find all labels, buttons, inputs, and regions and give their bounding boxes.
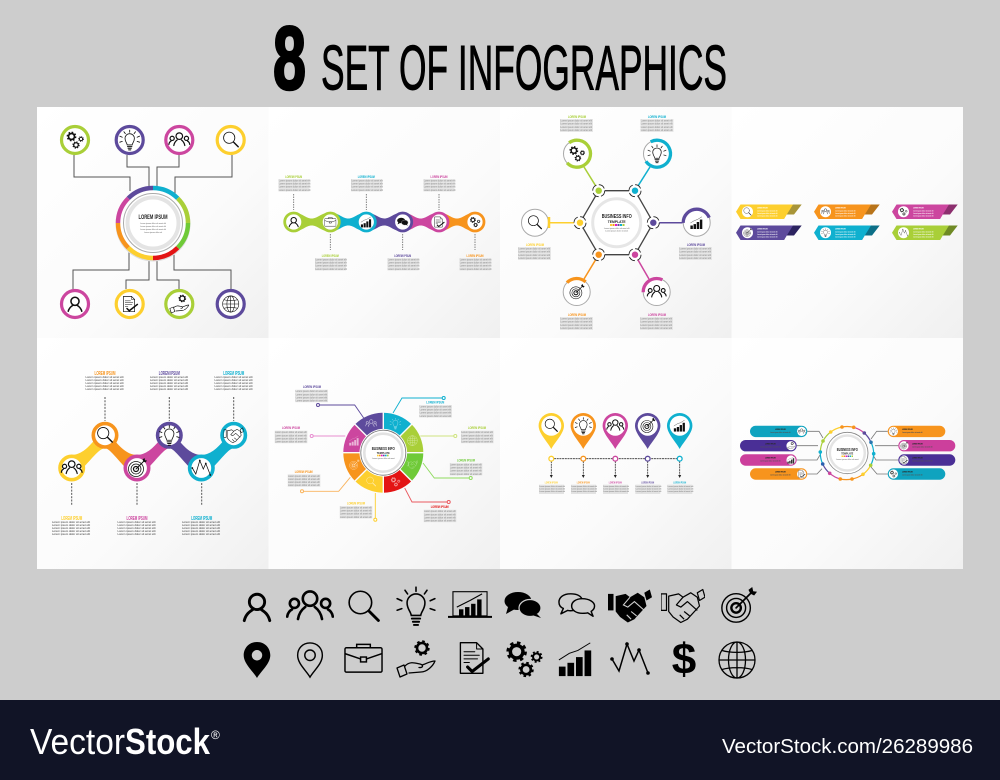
donut text blocks: Lorem ipsum dolor sit amet elit bbox=[275, 437, 307, 440]
banner: yellow: Lorem ipsum dolor sit amet elit bbox=[757, 214, 778, 218]
banner: cyan: LOREM IPSUM bbox=[835, 228, 846, 230]
pill: left orange: LOREM IPSUM bbox=[775, 472, 786, 474]
pill: right cyan bbox=[888, 468, 945, 480]
pill: left magenta: Lorem ipsum dolor sit amet elit bbox=[760, 460, 781, 463]
pin text blocks: Lorem ipsum dolor sit amet elit bbox=[668, 490, 694, 493]
donut text blocks: Lorem ipsum dolor sit amet elit bbox=[420, 415, 452, 418]
wave text blocks: Lorem ipsum dolor sit amet elit bbox=[182, 526, 220, 530]
banner: purple bbox=[736, 226, 802, 240]
banner: orange bbox=[814, 204, 880, 219]
wave text blocks: Lorem ipsum dolor sit amet elit bbox=[150, 387, 188, 391]
hexagon text blocks: Lorem ipsum dolor sit amet elit bbox=[560, 120, 592, 122]
donut text blocks: Lorem ipsum dolor sit amet elit bbox=[461, 440, 493, 444]
hexagon labels: LOREM IPSUM bbox=[568, 312, 586, 317]
pill: left purple: LOREM IPSUM bbox=[765, 443, 776, 445]
step text blocks: Lorem ipsum dolor sit amet elit bbox=[424, 186, 456, 189]
panel: segmented donut bbox=[268, 338, 500, 569]
central ring: Lorem ipsum dolor sit amet elit bbox=[140, 225, 166, 228]
timeline bbox=[549, 456, 682, 478]
step labels: LOREM IPSUM bbox=[394, 253, 412, 258]
banner: purple: Lorem ipsum dolor sit amet elit bbox=[757, 233, 778, 236]
donut text blocks: Lorem ipsum dolor sit amet elit bbox=[420, 409, 452, 412]
hexagon bbox=[580, 191, 653, 255]
pill: left orange: Lorem ipsum dolor sit amet elit bbox=[770, 474, 791, 477]
banner: orange: Lorem ipsum dolor sit amet elit bbox=[835, 212, 856, 215]
dashed leader lines bbox=[72, 397, 234, 506]
step text blocks: Lorem ipsum dolor sit amet elit bbox=[279, 180, 311, 182]
hexagon text blocks: Lorem ipsum dolor sit amet elit bbox=[640, 321, 672, 324]
donut text blocks: Lorem ipsum dolor sit amet elit bbox=[450, 470, 482, 473]
watermark bar: ® bbox=[211, 728, 220, 742]
banner: lime: LOREM IPSUM bbox=[913, 228, 924, 230]
hexagon text blocks: Lorem ipsum dolor sit amet elit bbox=[560, 129, 592, 132]
wave text blocks: Lorem ipsum dolor sit amet elit bbox=[214, 387, 253, 391]
step labels: LOREM IPSUM bbox=[285, 174, 303, 179]
step text blocks: Lorem ipsum dolor sit amet elit bbox=[460, 262, 492, 265]
step text blocks: Lorem ipsum dolor sit amet elit bbox=[351, 189, 383, 192]
wave labels bbox=[61, 371, 244, 522]
donut labels: LOREM IPSUM bbox=[282, 425, 300, 430]
donut centre bbox=[360, 429, 407, 477]
donut labels bbox=[282, 384, 486, 509]
chain nodes bbox=[285, 213, 484, 231]
central ring: Lorem ipsum dolor sit amet elit bbox=[140, 222, 166, 225]
step labels bbox=[285, 174, 484, 258]
watermark bar bbox=[0, 700, 1000, 780]
central circle: TEMPLATE bbox=[841, 452, 854, 456]
wave labels: LOREM IPSUM bbox=[126, 516, 148, 522]
pill: right purple: LOREM IPSUM bbox=[912, 458, 923, 460]
donut text blocks bbox=[275, 390, 494, 522]
hexagon text blocks: Lorem ipsum dolor sit amet elit bbox=[641, 123, 673, 126]
donut text blocks: Lorem ipsum dolor sit amet elit bbox=[420, 406, 452, 408]
outer icons bbox=[528, 145, 702, 299]
map pins bbox=[539, 413, 692, 449]
hexagon text blocks: Lorem ipsum dolor sit amet elit bbox=[679, 248, 711, 250]
donut labels: LOREM IPSUM bbox=[431, 504, 449, 509]
hexagon labels: LOREM IPSUM bbox=[648, 114, 666, 119]
wave text blocks: Lorem ipsum dolor sit amet elit bbox=[118, 523, 156, 527]
wave text blocks: Lorem ipsum dolor sit amet elit bbox=[118, 526, 156, 530]
wave text blocks: Lorem ipsum dolor sit amet elit bbox=[214, 375, 253, 379]
vertex dots bbox=[574, 185, 659, 261]
hexagon text blocks: Lorem ipsum dolor sit amet elit bbox=[640, 324, 672, 327]
watermark bar: Stock bbox=[125, 721, 211, 762]
banner: lime: Lorem ipsum dolor sit amet elit bbox=[913, 236, 934, 238]
hexagon text blocks: Lorem ipsum dolor sit amet elit bbox=[560, 327, 592, 330]
pin text blocks: Lorem ipsum dolor sit amet elit bbox=[603, 487, 629, 490]
banner: lime bbox=[892, 226, 958, 240]
title: 8 bbox=[273, 9, 306, 109]
wave labels: LOREM IPSUM bbox=[94, 371, 116, 377]
donut text blocks: Lorem ipsum dolor sit amet elit bbox=[424, 520, 456, 522]
step text blocks: Lorem ipsum dolor sit amet elit bbox=[279, 189, 311, 192]
banner: cyan: Lorem ipsum dolor sit amet elit bbox=[835, 233, 856, 236]
wave text blocks: Lorem ipsum dolor sit amet elit bbox=[52, 532, 90, 536]
central circle bbox=[827, 432, 868, 474]
donut segments bbox=[341, 410, 426, 495]
central ring: Lorem ipsum dolor sit bbox=[144, 231, 163, 234]
donut text blocks: Lorem ipsum dolor sit amet elit bbox=[450, 473, 482, 476]
hexagon text blocks: Lorem ipsum dolor sit amet elit bbox=[641, 126, 673, 129]
pin icons bbox=[545, 418, 685, 434]
pin text blocks: Lorem ipsum dolor sit amet elit bbox=[636, 487, 662, 490]
wave text blocks: Lorem ipsum dolor sit amet elit bbox=[182, 532, 220, 536]
step text blocks: Lorem ipsum dolor sit amet elit bbox=[315, 258, 347, 262]
hexagon text blocks: Lorem ipsum dolor sit amet elit bbox=[518, 251, 550, 254]
icon set: second row bbox=[244, 635, 755, 684]
wave text blocks: Lorem ipsum dolor sit amet elit bbox=[182, 520, 220, 524]
donut centre: TEMPLATE bbox=[377, 451, 390, 455]
donut text blocks: Lorem ipsum dolor sit amet elit bbox=[340, 513, 372, 516]
hexagon text blocks: Lorem ipsum dolor sit amet elit bbox=[640, 327, 672, 330]
donut text blocks: Lorem ipsum dolor sit amet elit bbox=[288, 484, 320, 487]
chain connectors bbox=[294, 212, 475, 232]
wave text blocks: Lorem ipsum dolor sit amet elit bbox=[52, 529, 90, 533]
pill: right purple bbox=[898, 454, 955, 466]
donut text blocks: Lorem ipsum dolor sit amet elit bbox=[296, 393, 328, 396]
banner: lime: Lorem ipsum dolor sit amet elit bbox=[913, 233, 934, 236]
step text blocks: Lorem ipsum dolor sit amet elit bbox=[460, 265, 492, 268]
step labels: LOREM IPSUM bbox=[430, 174, 448, 179]
pin labels: LOREM IPSUM bbox=[641, 480, 655, 484]
wave text blocks: Lorem ipsum dolor sit amet elit bbox=[214, 381, 253, 385]
banner: cyan bbox=[814, 226, 880, 240]
step text blocks: Lorem ipsum dolor sit amet elit bbox=[351, 186, 383, 189]
dashed leader lines bbox=[294, 194, 475, 250]
donut labels: LOREM IPSUM bbox=[426, 400, 445, 404]
pill connector lines bbox=[797, 431, 898, 474]
step text blocks: Lorem ipsum dolor sit amet elit bbox=[424, 183, 456, 186]
banner: yellow: Lorem ipsum dolor sit amet elit bbox=[757, 212, 778, 215]
pin labels bbox=[545, 480, 687, 484]
pill: right magenta: Lorem ipsum dolor sit amet elit bbox=[912, 445, 933, 448]
banner: magenta: Lorem ipsum dolor sit amet elit bbox=[913, 210, 934, 212]
wave text blocks: Lorem ipsum dolor sit amet elit bbox=[86, 375, 124, 379]
pill: left orange bbox=[750, 468, 807, 480]
wave text blocks: Lorem ipsum dolor sit amet elit bbox=[118, 520, 156, 524]
step labels: LOREM IPSUM bbox=[322, 253, 339, 258]
step text blocks: Lorem ipsum dolor sit amet elit bbox=[315, 265, 347, 268]
hexagon text blocks: Lorem ipsum dolor sit amet elit bbox=[679, 257, 711, 260]
donut labels: LOREM IPSUM bbox=[295, 469, 313, 474]
panel: wave timeline bbox=[37, 338, 268, 569]
banner: orange: Lorem ipsum dolor sit amet elit bbox=[835, 210, 856, 212]
hexagon labels: LOREM IPSUM bbox=[648, 312, 666, 317]
wave text blocks bbox=[52, 375, 253, 536]
pin text blocks: Lorem ipsum dolor sit amet elit bbox=[571, 485, 597, 488]
wave text blocks: Lorem ipsum dolor sit amet elit bbox=[150, 384, 188, 388]
pill: left magenta bbox=[740, 454, 797, 466]
pill: left purple bbox=[740, 440, 797, 451]
wave text blocks: Lorem ipsum dolor sit amet elit bbox=[118, 529, 156, 533]
hexagon text blocks: Lorem ipsum dolor sit amet elit bbox=[641, 120, 673, 122]
central ring bbox=[116, 186, 190, 262]
hexagon labels: LOREM IPSUM bbox=[687, 242, 705, 247]
hexagon text blocks: Lorem ipsum dolor sit amet elit bbox=[679, 254, 711, 257]
step text blocks: Lorem ipsum dolor sit amet elit bbox=[424, 180, 456, 182]
connector lines bbox=[73, 155, 232, 289]
hexagon text blocks: Lorem ipsum dolor sit amet elit bbox=[640, 318, 672, 320]
banner: cyan: Lorem ipsum dolor sit amet elit bbox=[835, 236, 856, 238]
step text blocks: Lorem ipsum dolor sit amet elit bbox=[351, 183, 383, 186]
hexagon centre: BUSINESS INFO bbox=[602, 214, 632, 220]
wave text blocks: Lorem ipsum dolor sit amet elit bbox=[86, 378, 124, 382]
pill: right magenta: LOREM IPSUM bbox=[912, 443, 923, 445]
pin labels: LOREM IPSUM bbox=[609, 480, 622, 484]
banner: magenta: Lorem ipsum dolor sit amet elit bbox=[913, 212, 934, 215]
banner: lime: Lorem ipsum dolor sit amet elit bbox=[913, 230, 934, 234]
central circle: BUSINESS INFO bbox=[837, 447, 858, 452]
hexagon text blocks: Lorem ipsum dolor sit amet elit bbox=[560, 318, 592, 320]
wave text blocks: Lorem ipsum dolor sit amet elit bbox=[214, 378, 253, 382]
wave labels: LOREM IPSUM bbox=[159, 371, 180, 377]
segment icons bbox=[349, 418, 418, 486]
wave text blocks: Lorem ipsum dolor sit amet elit bbox=[52, 526, 90, 530]
donut text blocks: Lorem ipsum dolor sit amet elit bbox=[420, 412, 452, 415]
pin text blocks: Lorem ipsum dolor sit amet elit bbox=[636, 485, 662, 488]
banner: magenta: Lorem ipsum dolor sit amet elit bbox=[913, 214, 934, 218]
icon set: second row: $ bbox=[672, 635, 696, 684]
donut text blocks: Lorem ipsum dolor sit amet elit bbox=[461, 431, 493, 434]
wave icons bbox=[61, 425, 244, 476]
panel: hexagon diagram bbox=[500, 107, 732, 338]
pin text blocks: Lorem ipsum dolor sit amet elit bbox=[539, 485, 565, 488]
pin text blocks: Lorem ipsum dolor sit amet elit bbox=[571, 490, 597, 493]
wave text blocks: Lorem ipsum dolor sit amet elit bbox=[150, 378, 188, 382]
wave text blocks: Lorem ipsum dolor sit amet elit bbox=[150, 381, 188, 385]
wave text blocks: Lorem ipsum dolor sit amet elit bbox=[182, 523, 220, 527]
node icons bbox=[67, 130, 239, 313]
banner: magenta: LOREM IPSUM bbox=[913, 208, 924, 210]
wave labels: LOREM IPSUM bbox=[191, 516, 212, 522]
icon set: first row bbox=[244, 587, 757, 625]
donut text blocks: Lorem ipsum dolor sit amet elit bbox=[461, 434, 493, 437]
banner: orange: Lorem ipsum dolor sit amet elit bbox=[835, 214, 856, 218]
callout end dots bbox=[300, 396, 472, 521]
step text blocks: Lorem ipsum dolor sit amet elit bbox=[279, 183, 311, 186]
step text blocks: Lorem ipsum dolor sit amet elit bbox=[460, 268, 492, 271]
hexagon labels bbox=[526, 114, 705, 317]
panel: map pin timeline bbox=[500, 338, 732, 569]
hexagon text blocks: Lorem ipsum dolor sit amet elit bbox=[518, 257, 550, 260]
banner: cyan: Lorem ipsum dolor sit amet elit bbox=[835, 230, 856, 234]
hexagon text blocks: Lorem ipsum dolor sit amet elit bbox=[560, 123, 592, 126]
banner: purple: Lorem ipsum dolor sit amet elit bbox=[757, 230, 778, 234]
hexagon centre bbox=[593, 199, 641, 247]
donut text blocks: Lorem ipsum dolor sit amet elit bbox=[424, 510, 456, 513]
donut text blocks: Lorem ipsum dolor sit amet elit bbox=[288, 475, 320, 478]
wave ribbon bbox=[72, 441, 234, 467]
panel: ribbon banners bbox=[732, 107, 963, 338]
outer circles bbox=[522, 135, 710, 311]
hexagon text blocks: Lorem ipsum dolor sit amet elit bbox=[560, 126, 592, 129]
donut centre: BUSINESS INFO bbox=[372, 446, 395, 451]
donut labels: LOREM IPSUM bbox=[347, 500, 365, 506]
pill: right orange: Lorem ipsum dolor sit amet elit bbox=[902, 431, 923, 434]
pin text blocks: Lorem ipsum dolor sit amet elit bbox=[571, 487, 597, 490]
pill: left cyan bbox=[750, 426, 807, 437]
wave text blocks: Lorem ipsum dolor sit amet elit bbox=[214, 384, 253, 388]
pin labels: LOREM IPSUM bbox=[545, 480, 558, 484]
hexagon text blocks: Lorem ipsum dolor sit amet elit bbox=[641, 129, 673, 132]
wave text blocks: Lorem ipsum dolor sit amet elit bbox=[86, 384, 124, 388]
hexagon text blocks: Lorem ipsum dolor sit amet elit bbox=[679, 251, 711, 254]
wave labels: LOREM IPSUM bbox=[223, 371, 244, 377]
hexagon labels: LOREM IPSUM bbox=[568, 114, 586, 119]
icon nodes bbox=[62, 126, 244, 318]
donut text blocks: Lorem ipsum dolor sit amet elit bbox=[450, 464, 482, 466]
banner: purple: Lorem ipsum dolor sit amet elit bbox=[757, 236, 778, 238]
watermark bar: VectorStock.com/26289986 bbox=[722, 736, 973, 758]
step labels: LOREM IPSUM bbox=[358, 174, 375, 179]
pin text blocks: Lorem ipsum dolor sit amet elit bbox=[603, 485, 629, 488]
step labels: LOREM IPSUM bbox=[466, 253, 484, 258]
pin text blocks: Lorem ipsum dolor sit amet elit bbox=[539, 487, 565, 490]
donut text blocks: Lorem ipsum dolor sit amet elit bbox=[296, 390, 328, 393]
chain icons bbox=[289, 217, 480, 227]
hexagon text blocks: Lorem ipsum dolor sit amet elit bbox=[518, 248, 550, 250]
step text blocks: Lorem ipsum dolor sit amet elit bbox=[351, 180, 383, 182]
pill: left purple: Lorem ipsum dolor sit amet elit bbox=[760, 445, 781, 448]
donut text blocks: Lorem ipsum dolor sit amet elit bbox=[275, 440, 307, 444]
hexagon text blocks: Lorem ipsum dolor sit amet elit bbox=[518, 254, 550, 257]
hexagon centre: TEMPLATE bbox=[608, 220, 626, 224]
donut text blocks: Lorem ipsum dolor sit amet elit bbox=[340, 516, 372, 519]
banner: yellow bbox=[736, 204, 802, 219]
donut text blocks: Lorem ipsum dolor sit amet elit bbox=[275, 431, 307, 434]
wave nodes bbox=[60, 424, 245, 480]
wave text blocks: Lorem ipsum dolor sit amet elit bbox=[86, 381, 124, 385]
wave text blocks: Lorem ipsum dolor sit amet elit bbox=[52, 520, 90, 524]
central ring: Lorem ipsum dolor sit amet elit bbox=[140, 228, 166, 231]
donut text blocks: Lorem ipsum dolor sit amet elit bbox=[275, 434, 307, 437]
donut centre: Lorem ipsum dolor sit amet bbox=[372, 457, 395, 460]
step text blocks: Lorem ipsum dolor sit amet elit bbox=[460, 258, 492, 262]
step text blocks: Lorem ipsum dolor sit amet elit bbox=[388, 268, 420, 271]
pill: left cyan: LOREM IPSUM bbox=[775, 429, 786, 431]
pin labels: LOREM IPSUM bbox=[673, 480, 687, 484]
step text blocks: Lorem ipsum dolor sit amet elit bbox=[388, 262, 420, 265]
hexagon centre: Lorem ipsum dolor sit amet bbox=[605, 230, 629, 232]
pin text blocks: Lorem ipsum dolor sit amet elit bbox=[668, 487, 694, 490]
pill: right cyan: LOREM IPSUM bbox=[902, 472, 913, 474]
pin labels: LOREM IPSUM bbox=[577, 480, 590, 484]
wave text blocks: Lorem ipsum dolor sit amet elit bbox=[86, 387, 124, 391]
wave labels: LOREM IPSUM bbox=[61, 516, 82, 522]
pin text blocks: Lorem ipsum dolor sit amet elit bbox=[539, 490, 565, 493]
coloured spokes bbox=[549, 167, 682, 279]
panel: linear six-step chain bbox=[268, 107, 500, 338]
donut text blocks: Lorem ipsum dolor sit amet elit bbox=[340, 510, 372, 513]
pill: left magenta: LOREM IPSUM bbox=[765, 458, 776, 460]
donut text blocks: Lorem ipsum dolor sit amet elit bbox=[296, 400, 328, 402]
pin text blocks: Lorem ipsum dolor sit amet elit bbox=[636, 490, 662, 493]
pill: right cyan: Lorem ipsum dolor sit amet elit bbox=[902, 474, 923, 477]
wave text blocks: Lorem ipsum dolor sit amet elit bbox=[118, 532, 156, 536]
pill: right orange bbox=[888, 426, 945, 437]
donut text blocks: Lorem ipsum dolor sit amet elit bbox=[424, 516, 456, 519]
pin text blocks bbox=[539, 485, 694, 494]
banner: magenta bbox=[892, 204, 958, 219]
banner: orange: LOREM IPSUM bbox=[835, 208, 846, 210]
title bbox=[273, 9, 727, 109]
donut text blocks: Lorem ipsum dolor sit amet elit bbox=[340, 506, 372, 510]
step text blocks: Lorem ipsum dolor sit amet elit bbox=[424, 189, 456, 192]
wave text blocks: Lorem ipsum dolor sit amet elit bbox=[182, 529, 220, 533]
banner: purple: LOREM IPSUM bbox=[757, 228, 768, 230]
donut labels: LOREM IPSUM bbox=[457, 458, 475, 462]
pill: right orange: LOREM IPSUM bbox=[902, 429, 913, 431]
step text blocks: Lorem ipsum dolor sit amet elit bbox=[279, 186, 311, 189]
step text blocks: Lorem ipsum dolor sit amet elit bbox=[315, 262, 347, 265]
step text blocks: Lorem ipsum dolor sit amet elit bbox=[388, 265, 420, 268]
donut text blocks: Lorem ipsum dolor sit amet elit bbox=[296, 396, 328, 399]
donut text blocks: Lorem ipsum dolor sit amet elit bbox=[288, 478, 320, 481]
central ring: LOREM IPSUM bbox=[138, 214, 168, 221]
banner: yellow: LOREM IPSUM bbox=[757, 208, 768, 210]
donut labels: LOREM IPSUM bbox=[468, 425, 486, 430]
hexagon labels: LOREM IPSUM bbox=[526, 242, 544, 247]
step text blocks: Lorem ipsum dolor sit amet elit bbox=[315, 268, 347, 271]
hexagon text blocks: Lorem ipsum dolor sit amet elit bbox=[560, 324, 592, 327]
pill: left cyan: Lorem ipsum dolor sit amet elit bbox=[770, 431, 791, 434]
pill: right purple: Lorem ipsum dolor sit amet elit bbox=[912, 460, 933, 463]
donut text blocks: Lorem ipsum dolor sit amet elit bbox=[288, 481, 320, 484]
hexagon text blocks bbox=[518, 119, 712, 330]
step text blocks bbox=[278, 179, 492, 271]
donut labels: LOREM IPSUM bbox=[303, 384, 321, 389]
donut text blocks: Lorem ipsum dolor sit amet elit bbox=[450, 467, 482, 470]
wave text blocks: Lorem ipsum dolor sit amet elit bbox=[52, 523, 90, 527]
wave text blocks: Lorem ipsum dolor sit amet elit bbox=[150, 375, 188, 379]
hexagon text blocks: Lorem ipsum dolor sit amet elit bbox=[560, 321, 592, 324]
donut text blocks: Lorem ipsum dolor sit amet elit bbox=[424, 513, 456, 516]
dotted ring bbox=[818, 425, 876, 481]
donut text blocks: Lorem ipsum dolor sit amet elit bbox=[461, 437, 493, 440]
banner: yellow: Lorem ipsum dolor sit amet elit bbox=[757, 210, 778, 212]
pill: right magenta bbox=[898, 440, 955, 451]
panel: pill circle diagram bbox=[732, 338, 963, 569]
hexagon centre: Lorem ipsum dolor sit amet elit bbox=[604, 227, 630, 230]
central circle: Lorem ipsum dolor sit amet bbox=[836, 458, 859, 461]
panel: radial eight-node diagram bbox=[37, 107, 268, 338]
callout lines bbox=[302, 398, 471, 520]
pin text blocks: Lorem ipsum dolor sit amet elit bbox=[603, 490, 629, 493]
step text blocks: Lorem ipsum dolor sit amet elit bbox=[388, 258, 420, 262]
watermark bar: Vector bbox=[30, 721, 125, 762]
pin text blocks: Lorem ipsum dolor sit amet elit bbox=[668, 485, 694, 488]
